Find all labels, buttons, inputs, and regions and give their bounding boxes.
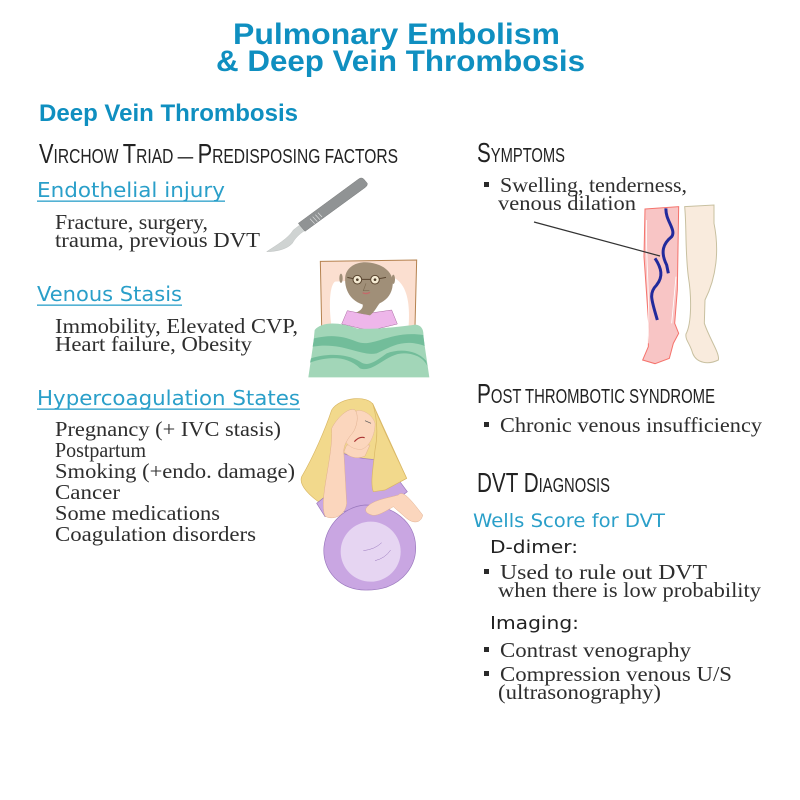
title: & Deep Vein Thrombosis	[216, 45, 585, 78]
heading: dvt diagnosis: DVT DIAGNOSIS	[477, 467, 610, 498]
text: d-dimer: when there is low probability	[498, 578, 762, 602]
section: venous stasis: Venous Stasis	[37, 282, 182, 306]
text: symptoms list: Swelling, tenderness,	[500, 173, 687, 197]
section: hypercoagulation states: Smoking (+endo. damage)	[55, 459, 295, 483]
text: imaging: Imaging:	[490, 614, 579, 634]
icon: pregnant woman with headache	[301, 399, 423, 590]
icon: legs with deep vein thrombosis	[643, 205, 719, 364]
heading: deep vein thrombosis: Deep Vein Thrombosis	[39, 100, 298, 127]
text: imaging: (ultrasonography)	[498, 680, 661, 704]
text: imaging: Contrast venography	[500, 638, 692, 662]
section: hypercoagulation states	[37, 386, 300, 546]
arrow: leader line to vein	[534, 222, 660, 256]
text: d-dimer: Used to rule out DVT	[500, 560, 707, 584]
section: venous stasis	[37, 282, 298, 356]
heading: symptoms: SYMPTOMS	[477, 137, 565, 168]
heading: post thrombotic syndrome: POST THROMBOTIC SYNDROME	[477, 378, 715, 409]
section: venous stasis: Immobility, Elevated CVP,	[55, 314, 298, 338]
title: Pulmonary Embolism	[233, 18, 560, 51]
section: hypercoagulation states: Coagulation disorders	[55, 522, 256, 546]
section: hypercoagulation states: Pregnancy (+ IVC stasis)	[55, 417, 281, 441]
section: hypercoagulation states: Cancer	[55, 480, 120, 504]
section: endothelial injury	[37, 178, 260, 252]
text: imaging	[484, 614, 732, 704]
section: endothelial injury: Fracture, surgery,	[55, 210, 208, 234]
text: d-dimer	[484, 538, 762, 602]
section: venous stasis: Heart failure, Obesity	[55, 332, 253, 356]
section: hypercoagulation states: Some medications	[55, 501, 220, 525]
icon: scalpel	[267, 178, 367, 252]
subheading: wells score: Wells Score for DVT	[473, 510, 665, 532]
text: imaging: Compression venous U/S	[500, 662, 732, 686]
text: d-dimer: D-dimer:	[490, 538, 578, 558]
section: endothelial injury: Endothelial injury	[37, 178, 225, 202]
text: post thrombotic list: Chronic venous insufficiency	[500, 413, 763, 437]
section: hypercoagulation states: Postpartum	[55, 438, 146, 462]
section: hypercoagulation states: Hypercoagulation States	[37, 386, 300, 410]
icon: elderly patient in bed	[308, 260, 429, 377]
section: endothelial injury: trauma, previous DVT	[55, 228, 260, 252]
text: symptoms list: venous dilation	[498, 191, 637, 215]
heading: virchow triad: VIRCHOW TRIAD — PREDISPOSING FACTORS	[39, 138, 398, 169]
text: symptoms list	[484, 173, 687, 215]
title	[216, 18, 585, 78]
